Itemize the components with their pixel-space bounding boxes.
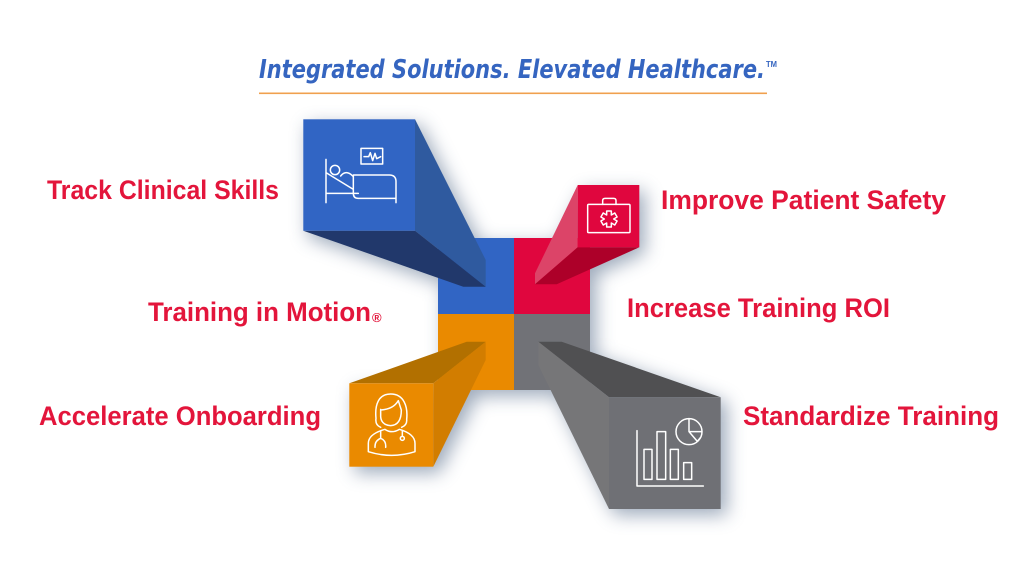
gray front face bbox=[609, 397, 721, 509]
title underline bbox=[259, 92, 767, 94]
title: TM bbox=[766, 60, 777, 69]
label: Improve Patient Safety: Improve Patient Safety bbox=[661, 185, 946, 215]
icon: medical case bbox=[588, 198, 630, 233]
blue front face bbox=[303, 119, 415, 231]
red bottom face bbox=[535, 247, 639, 284]
label: Increase Training ROI: Increase Training ROI bbox=[627, 293, 890, 323]
label: Accelerate Onboarding: Accelerate Onboarding bbox=[39, 401, 321, 431]
central square bbox=[438, 238, 590, 390]
orange front face bbox=[349, 383, 433, 467]
orange side face bbox=[433, 342, 486, 467]
gray block bbox=[538, 342, 721, 509]
icon: bar and pie chart bbox=[637, 419, 703, 486]
quadrant: gray bbox=[514, 314, 590, 390]
orange block bbox=[349, 342, 486, 467]
blue side face bbox=[415, 119, 486, 287]
quadrant: red bbox=[514, 238, 590, 314]
icon: nurse bbox=[368, 394, 415, 455]
red side face bbox=[535, 185, 578, 284]
soft drop shadows bbox=[308, 125, 727, 515]
label: Training in Motion: ® bbox=[372, 310, 382, 325]
label: Training in Motion: Training in Motion bbox=[148, 297, 371, 327]
label: Standardize Training: Standardize Training bbox=[743, 401, 999, 431]
label: Track Clinical Skills: Track Clinical Skills bbox=[47, 175, 279, 205]
blue bottom face bbox=[303, 231, 486, 287]
quadrant: orange bbox=[438, 314, 514, 390]
orange top face bbox=[349, 342, 486, 383]
red front face bbox=[578, 185, 639, 247]
title: Integrated Solutions. Elevated Healthcare. bbox=[259, 55, 765, 85]
blue block bbox=[303, 119, 486, 287]
red block bbox=[535, 185, 639, 284]
quadrant: blue bbox=[438, 238, 514, 314]
icon: patient bed bbox=[326, 148, 396, 203]
gray top face bbox=[538, 342, 721, 397]
gray side face bbox=[538, 342, 609, 509]
